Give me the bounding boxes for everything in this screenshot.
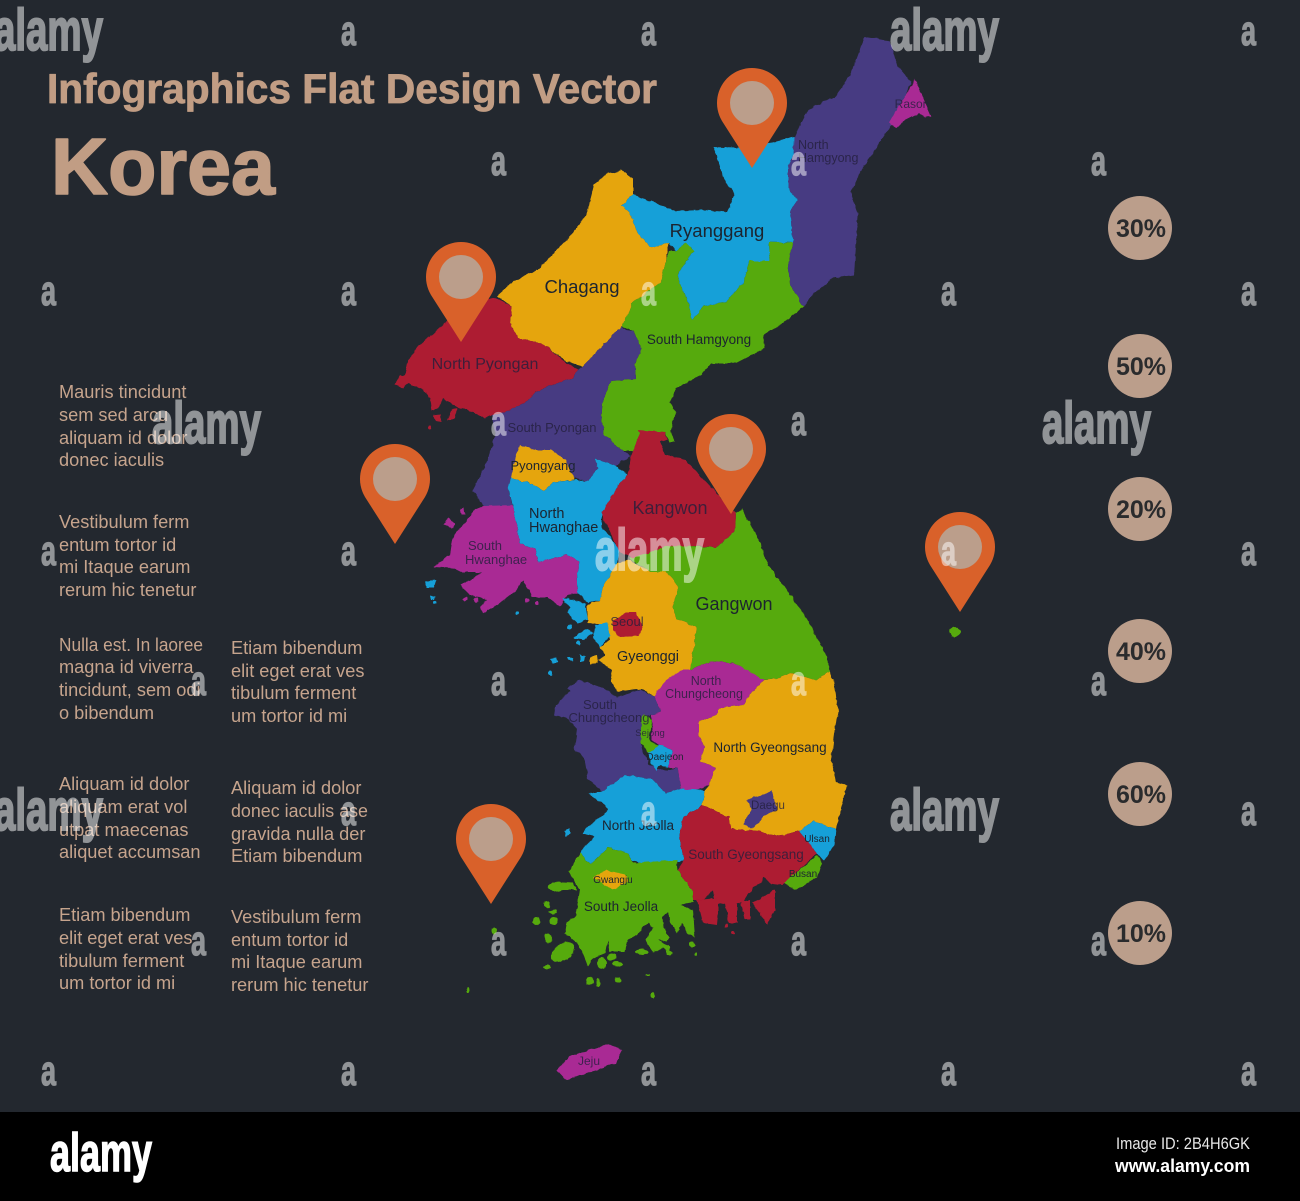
watermarks: a — [341, 7, 356, 54]
region: west islands — [425, 580, 610, 837]
percentage badges: 60% — [1116, 781, 1166, 809]
map labels: North Gyeongsang — [713, 740, 827, 755]
text blocks left column: rerum hic tenetur — [59, 580, 196, 600]
map labels: Hamgyong — [798, 151, 858, 165]
map labels: Pyongyang — [510, 458, 576, 473]
text blocks second column — [231, 638, 368, 995]
watermarks: a — [41, 267, 56, 314]
text blocks left column: Aliquam id dolor — [59, 774, 189, 794]
watermarks: a — [341, 527, 356, 574]
map labels: Ryanggang — [670, 220, 764, 241]
text blocks second column: Etiam bibendum — [231, 846, 362, 866]
watermarks: a — [491, 137, 506, 184]
text blocks left column: elit eget erat ves — [59, 928, 192, 948]
region: southwest islands — [466, 627, 961, 998]
pin: south-west — [456, 804, 526, 904]
map labels: Rason — [895, 97, 929, 111]
text blocks second column: Vestibulum ferm — [231, 907, 361, 927]
region: Rason — [889, 78, 931, 128]
region: Pyongyang — [511, 445, 575, 491]
footer bar — [0, 1112, 1300, 1201]
watermarks: a — [341, 787, 356, 834]
text blocks second column: gravida nulla der — [231, 824, 365, 844]
region: North Chungcheong — [652, 661, 765, 791]
watermarks: a — [1091, 137, 1106, 184]
text blocks second column: Aliquam id dolor — [231, 778, 361, 798]
watermarks: alamy — [595, 518, 704, 583]
region: Daegu — [743, 791, 777, 829]
pin markers — [360, 68, 995, 904]
map labels: North — [529, 506, 564, 522]
text blocks left column: Etiam bibendum — [59, 905, 190, 925]
watermarks: alamy — [1042, 391, 1151, 456]
pin: north — [717, 68, 787, 168]
text blocks left column: utpat maecenas — [59, 820, 188, 840]
text blocks second column: tibulum ferment — [231, 683, 356, 703]
text blocks left column: magna id viverra — [59, 657, 194, 677]
text blocks left column: tincidunt, sem odi — [59, 680, 201, 700]
title: Infographics Flat Design Vector — [47, 65, 657, 112]
map labels: Sejong — [635, 728, 665, 739]
map labels: Chungcheong — [665, 687, 743, 701]
region: Ulsan — [799, 821, 836, 861]
region: Gwangju — [593, 870, 628, 890]
map labels: Ulsan — [804, 834, 830, 845]
watermarks: a — [191, 917, 206, 964]
pin: west — [360, 444, 430, 544]
title: Korea — [51, 122, 275, 211]
watermarks: a — [941, 1047, 956, 1094]
watermarks: a — [791, 657, 806, 704]
region: North Gyeongsang — [699, 672, 847, 836]
watermarks: a — [641, 787, 656, 834]
text blocks left column: Nulla est. In laoree — [59, 635, 203, 655]
watermarks: a — [641, 267, 656, 314]
map labels: Chungcheong — [569, 710, 649, 725]
watermarks: alamy — [890, 778, 999, 843]
watermarks: a — [791, 397, 806, 444]
map labels: Jeju — [578, 1054, 600, 1068]
pin: north-west — [426, 242, 496, 342]
region: South Hwanghae — [433, 505, 580, 613]
watermarks: a — [941, 267, 956, 314]
map labels: North — [691, 674, 721, 688]
map labels: Hwanghae — [465, 552, 527, 567]
region: South Chungcheong — [554, 680, 681, 793]
region: North Hwanghae — [508, 458, 628, 603]
text blocks left column: aliquet accumsan — [59, 842, 201, 862]
map labels: Chagang — [544, 276, 620, 297]
text blocks second column: elit eget erat ves — [231, 661, 364, 681]
map labels: Hwanghae — [529, 520, 598, 536]
map labels: South Jeolla — [584, 899, 659, 914]
watermarks: a — [791, 137, 806, 184]
region: Sejong — [641, 715, 659, 754]
percentage badges — [1108, 196, 1172, 965]
map labels: Busan — [789, 869, 817, 880]
watermarks: a — [1091, 657, 1106, 704]
percentage badges: 40% — [1116, 638, 1166, 666]
watermarks: a — [491, 657, 506, 704]
footer bar: alamy — [50, 1123, 152, 1183]
region: North Hamgyong — [777, 37, 911, 307]
watermarks: a — [341, 267, 356, 314]
region: South Jeolla — [565, 848, 695, 967]
pin: central — [696, 414, 766, 514]
text blocks left column: entum tortor id — [59, 535, 176, 555]
map labels: North Jeolla — [602, 818, 675, 833]
region: South Gyeongsang — [678, 805, 817, 905]
text blocks left column: tibulum ferment — [59, 951, 184, 971]
watermarks: a — [941, 527, 956, 574]
watermarks: a — [41, 1047, 56, 1094]
region: Kangwon — [601, 430, 736, 558]
text blocks left column — [59, 382, 203, 993]
region: Busan — [783, 855, 822, 890]
region: Jeju — [557, 1044, 622, 1080]
region: Ryanggang — [621, 137, 797, 320]
text blocks left column: donec iaculis — [59, 450, 164, 470]
watermarks: a — [491, 397, 506, 444]
region: South Hwanghae islets — [443, 508, 539, 605]
text blocks second column: rerum hic tenetur — [231, 975, 368, 995]
region: North Jeolla — [580, 775, 704, 865]
map of Korea — [394, 37, 961, 1080]
watermarks: a — [191, 657, 206, 704]
watermarks: a — [1241, 267, 1256, 314]
watermarks: a — [1241, 787, 1256, 834]
map labels: South — [468, 538, 502, 553]
text blocks second column: um tortor id mi — [231, 706, 347, 726]
text blocks left column: aliquam erat vol — [59, 797, 187, 817]
watermarks: a — [41, 527, 56, 574]
text blocks second column: entum tortor id — [231, 930, 348, 950]
region: South Hamgyong — [601, 242, 804, 451]
percentage badges: 10% — [1116, 920, 1166, 948]
text blocks left column: Vestibulum ferm — [59, 512, 189, 532]
region: Daejeon — [649, 745, 672, 770]
watermarks: a — [641, 7, 656, 54]
watermarks: a — [641, 1047, 656, 1094]
map labels: Gyeonggi — [617, 649, 679, 665]
text blocks second column: mi Itaque earum — [231, 952, 362, 972]
title — [47, 65, 657, 211]
footer bar: Image ID: 2B4H6GK — [1116, 1134, 1251, 1153]
text blocks second column: donec iaculis ase — [231, 801, 368, 821]
watermarks: a — [1241, 1047, 1256, 1094]
region: Chagang — [497, 170, 669, 366]
region: South Pyongan — [473, 326, 642, 506]
map labels: Gwangju — [593, 875, 633, 886]
map labels: North — [798, 138, 829, 152]
map labels: Daejeon — [646, 752, 684, 763]
watermarks: a — [1241, 527, 1256, 574]
map labels — [432, 97, 929, 1068]
map labels: Daegu — [751, 800, 785, 812]
text blocks left column: Mauris tincidunt — [59, 382, 186, 402]
map labels: Gangwon — [695, 594, 773, 614]
map labels: South Gyeongsang — [688, 847, 804, 862]
map labels: South — [583, 697, 617, 712]
region: Gyeonggi islet — [590, 655, 598, 664]
region: North Pyongan islets — [428, 408, 457, 429]
watermarks: alamy — [152, 391, 261, 456]
watermarks: a — [491, 917, 506, 964]
watermarks: a — [341, 1047, 356, 1094]
region: Gyeonggi — [587, 560, 697, 696]
watermarks: a — [1091, 917, 1106, 964]
text blocks left column: aliquam id dolor — [59, 428, 187, 448]
region: North Pyongan — [394, 297, 578, 418]
text blocks second column: Etiam bibendum — [231, 638, 362, 658]
footer bar: www.alamy.com — [1114, 1156, 1250, 1176]
text blocks left column: sem sed arcu — [59, 405, 168, 425]
region: Gangwon — [628, 509, 829, 680]
percentage badges: 20% — [1116, 496, 1166, 524]
text blocks left column: o bibendum — [59, 703, 154, 723]
map labels: South Hamgyong — [647, 332, 751, 347]
watermarks: a — [791, 917, 806, 964]
map labels: Kangwon — [632, 498, 708, 518]
region: South Gyeongsang peninsulas — [697, 890, 775, 935]
map labels: North Pyongan — [432, 356, 538, 373]
map labels: South Pyongan — [508, 420, 596, 435]
percentage badges: 30% — [1116, 215, 1166, 243]
region: Seoul — [613, 612, 643, 637]
map labels: Seoul — [610, 614, 644, 629]
text blocks left column: um tortor id mi — [59, 973, 175, 993]
pin: east — [925, 512, 995, 612]
text blocks left column: mi Itaque earum — [59, 557, 190, 577]
watermarks: a — [1241, 7, 1256, 54]
percentage badges: 50% — [1116, 353, 1166, 381]
